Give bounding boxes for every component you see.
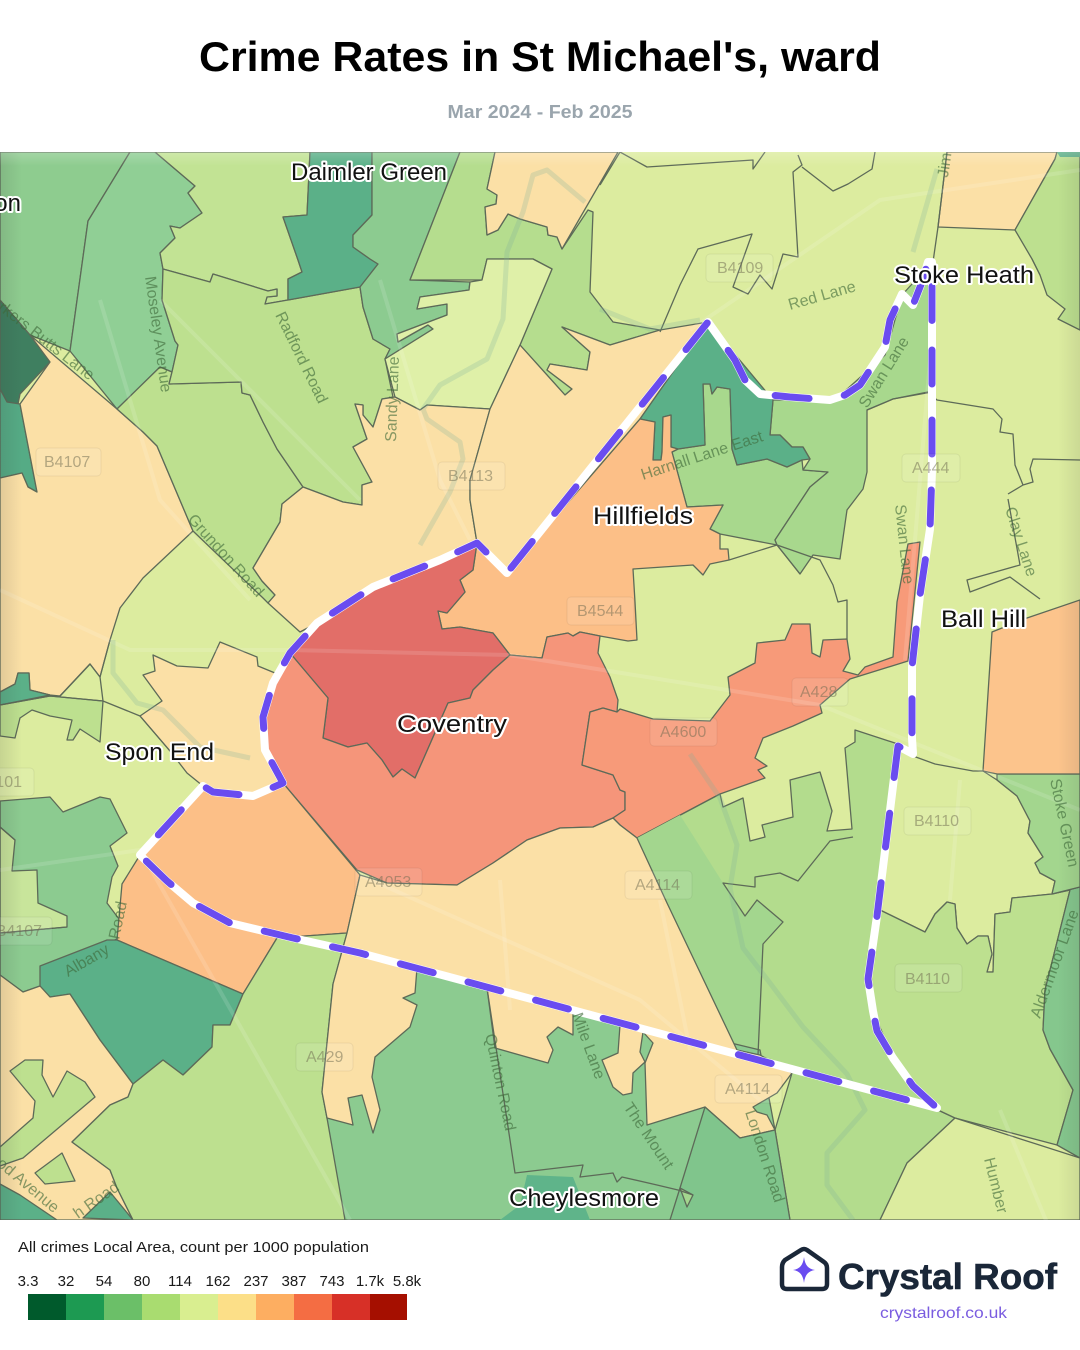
legend labels: 237 [243, 1273, 269, 1290]
road number shields: A4114 [635, 877, 680, 894]
road name labels: Quinton Road [481, 1032, 518, 1132]
ward boundary [140, 262, 937, 1108]
icon: crystal house [782, 1249, 827, 1289]
place labels: Daimler Green [291, 159, 447, 186]
road name labels: Clay Lane [1001, 505, 1040, 579]
road number shields: B4107 [44, 454, 90, 471]
road number shields: A429 [306, 1049, 343, 1066]
road name labels: Mile Lane [568, 1011, 608, 1082]
title: Crime Rates in St Michael's, ward [199, 33, 881, 80]
road name labels: Humber [980, 1156, 1011, 1216]
road number shields [0, 254, 971, 1103]
road number shields: A428 [800, 684, 837, 701]
map edge shading [0, 152, 15, 1220]
road number shields: A444 [912, 460, 949, 477]
place labels: Spon End [105, 739, 214, 766]
road name labels: London Road [741, 1108, 787, 1205]
road number shields: B4113 [448, 468, 493, 485]
place labels: Coventry [397, 711, 507, 738]
legend labels: 743 [319, 1273, 345, 1290]
place labels: Stoke Heath [894, 262, 1034, 289]
legend labels: 387 [281, 1273, 307, 1290]
district boundary lines [0, 152, 1080, 1195]
road number shields: B4109 [717, 260, 763, 277]
legend labels: 54 [96, 1273, 112, 1290]
river [113, 169, 937, 1220]
road number shields: A4053 [365, 874, 411, 891]
legend title: All crimes Local Area, count per 1000 population [18, 1239, 369, 1256]
road name labels: Albany [62, 941, 112, 980]
road name labels: Sandy Lane [383, 356, 403, 442]
legend labels [18, 1273, 422, 1290]
subtitle: date range: Mar 2024 - Feb 2025 [448, 102, 632, 122]
faint road network [0, 168, 1080, 1220]
legend labels: 1.7k [356, 1273, 385, 1290]
road name labels: Moseley Avenue [141, 275, 174, 394]
legend labels: 114 [168, 1273, 192, 1290]
road number shields: B4110 [905, 971, 950, 988]
road name labels: The Mount [620, 1100, 677, 1173]
road name labels: Swan Lane [856, 334, 913, 411]
place labels [0, 159, 1034, 1212]
road name labels: Jimmy [935, 130, 958, 179]
legend colour scale [28, 1294, 407, 1320]
logo url: crystalroof.co.uk [880, 1305, 1008, 1322]
road number shields: A4600 [660, 724, 706, 741]
road name labels: Radford Road [271, 309, 330, 406]
legend labels: 80 [134, 1273, 150, 1290]
choropleth map [0, 152, 1080, 1220]
road number shields: A4114 [725, 1081, 770, 1098]
road name labels: Road [106, 900, 131, 941]
logo [782, 1249, 1058, 1322]
legend labels: 162 [205, 1273, 231, 1290]
road name labels: Harnall Lane East [639, 428, 766, 484]
road name labels: Grundon Road [184, 511, 267, 601]
road name labels: Red Lane [786, 278, 858, 314]
road number shields: B4544 [577, 603, 623, 620]
place labels: Ball Hill [941, 606, 1026, 633]
legend labels: 32 [58, 1273, 74, 1290]
place labels: Hillfields [593, 503, 693, 530]
legend labels: 5.8k [393, 1273, 422, 1290]
road name labels: h Road [71, 1179, 123, 1222]
road name labels: Swan Lane [891, 504, 916, 585]
legend labels: 3.3 [18, 1273, 38, 1290]
logo wordmark: Crystal Roof [838, 1256, 1058, 1297]
road number shields: B4110 [914, 813, 959, 830]
place labels: Cheylesmore [509, 1185, 659, 1212]
